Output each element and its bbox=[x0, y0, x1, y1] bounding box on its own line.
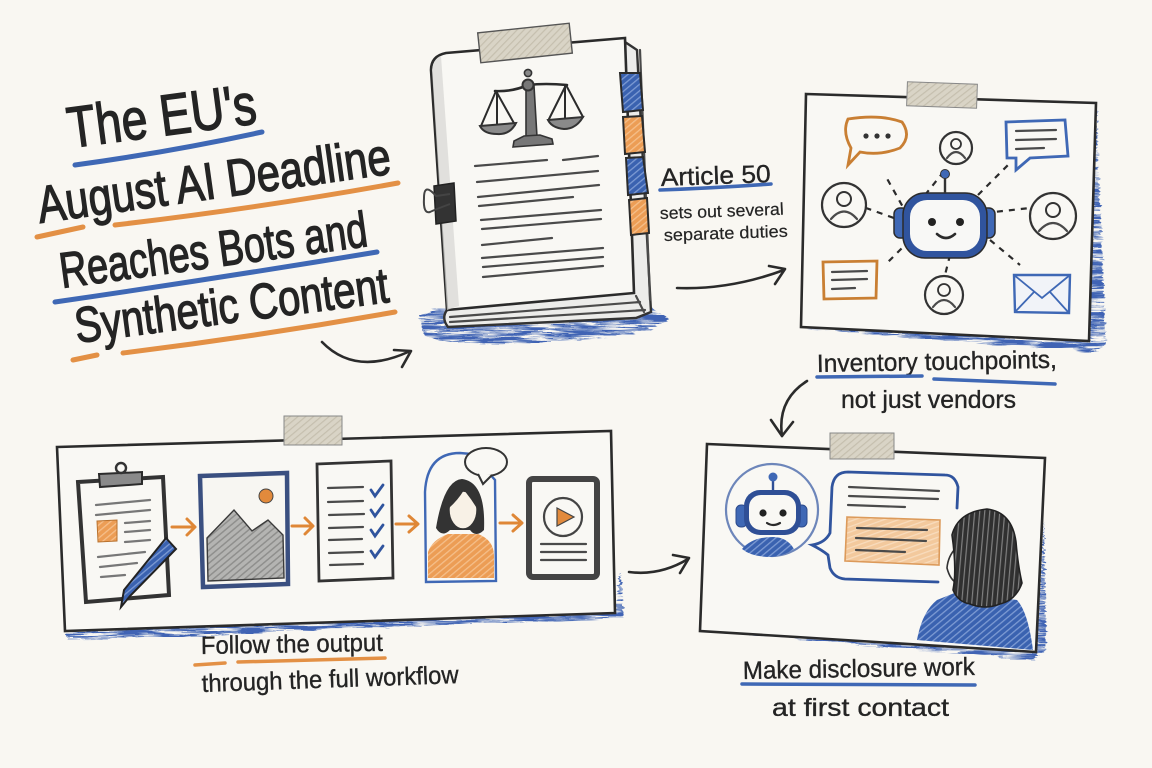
title: August AI Deadline bbox=[34, 128, 394, 235]
title bbox=[34, 72, 398, 360]
icon: person right bbox=[1030, 193, 1076, 239]
panel shadow bbox=[64, 570, 624, 640]
icon: image frame bbox=[200, 473, 288, 587]
caption: Follow the output: Follow the output bbox=[201, 629, 383, 660]
panel sheet bbox=[801, 94, 1096, 341]
icon: robot avatar bbox=[726, 464, 818, 557]
icon: person with speech bubble bbox=[425, 448, 507, 582]
tape bbox=[830, 433, 894, 459]
caption: Make disclosure work bbox=[742, 653, 976, 722]
arrow: workflow to disclosure bbox=[629, 555, 689, 573]
caption: Inventory touchpoints: Inventory touchpoints, bbox=[817, 346, 1057, 378]
icon: binder clip bbox=[424, 183, 456, 224]
icon: checklist bbox=[317, 461, 393, 581]
arrow: touchpoints to disclosure bbox=[771, 381, 807, 436]
arrow: workflow step 3 bbox=[396, 516, 418, 532]
title: The EU's bbox=[63, 72, 260, 161]
title: Reaches Bots and bbox=[56, 201, 371, 299]
icon: scales of justice bbox=[480, 69, 583, 147]
panel shadow bbox=[700, 520, 1046, 660]
arrow: workflow step 4 bbox=[500, 515, 522, 531]
icon: person from behind bbox=[917, 509, 1033, 650]
arrow: title to handbook bbox=[322, 342, 411, 367]
caption: Follow the output: through the full workflow bbox=[201, 661, 460, 698]
binder shadow bbox=[418, 300, 668, 344]
icon: person left bbox=[822, 183, 866, 227]
icon: person bottom bbox=[925, 276, 963, 314]
caption: Make disclosure work: at first contact bbox=[772, 694, 949, 722]
icon: clipboard and pencil bbox=[78, 463, 176, 607]
caption: Article 50: separate duties bbox=[663, 222, 788, 245]
icon: person top bbox=[940, 132, 972, 164]
document text lines bbox=[475, 156, 603, 277]
spine shading bbox=[432, 56, 459, 310]
book edge lines bbox=[450, 50, 650, 322]
icon: orange speech bubble bbox=[846, 117, 907, 165]
dashed connectors bbox=[866, 163, 1030, 275]
panel sheet bbox=[700, 444, 1045, 652]
arrow: Article 50 to touchpoints bbox=[677, 266, 785, 288]
icon: orange note bbox=[823, 261, 877, 299]
panel: disclosure bbox=[700, 433, 1046, 660]
tabs bbox=[620, 73, 649, 235]
tape bbox=[284, 416, 342, 445]
binder cover bbox=[431, 38, 634, 310]
panel shadow bbox=[800, 104, 1106, 352]
speech bubble with message bbox=[812, 472, 958, 582]
arrow: workflow step 2 bbox=[292, 518, 313, 534]
icon: blue message bubble bbox=[1006, 120, 1068, 170]
panel sheet bbox=[57, 431, 615, 631]
caption: Inventory touchpoints bbox=[817, 346, 1057, 414]
caption: Article 50: Article 50 bbox=[660, 160, 771, 192]
icon: video tablet bbox=[529, 479, 597, 577]
tape bbox=[907, 82, 977, 108]
title: Synthetic Content bbox=[71, 257, 392, 354]
tape bbox=[478, 23, 572, 63]
icon: robot bbox=[894, 170, 995, 258]
icon: legal document binder bbox=[418, 23, 668, 344]
icon: envelope bbox=[1014, 275, 1070, 313]
caption: Inventory touchpoints: not just vendors bbox=[841, 386, 1016, 414]
caption: Make disclosure work: Make disclosure work bbox=[743, 653, 976, 685]
page stack bbox=[444, 42, 651, 327]
panel: workflow bbox=[57, 416, 624, 640]
caption: Article 50 bbox=[659, 160, 788, 245]
arrow: workflow step 1 bbox=[172, 519, 195, 535]
caption: Article 50: sets out several bbox=[659, 200, 784, 223]
caption: Follow the output bbox=[195, 629, 460, 698]
panel: touchpoints bbox=[800, 82, 1106, 352]
